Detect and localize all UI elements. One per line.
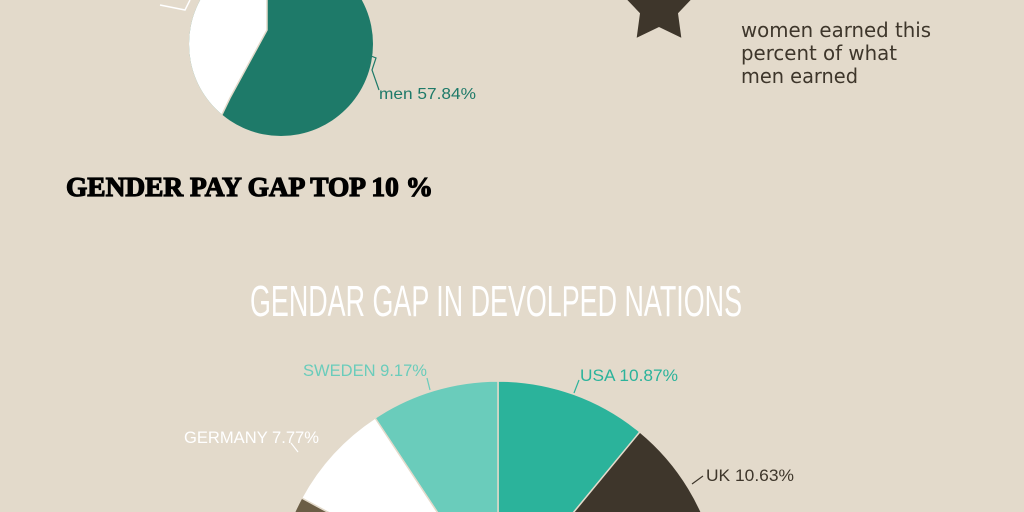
caption text: men earned <box>741 64 858 88</box>
caption text <box>741 18 931 88</box>
heading: gender pay gap: GENDER PAY GAP TOP 10 % <box>66 172 433 202</box>
pie chart: nations <box>275 381 716 512</box>
label: men <box>371 56 476 103</box>
slice: UK <box>498 432 716 512</box>
label: Sweden <box>303 361 430 390</box>
caption text: percent of what <box>741 41 897 65</box>
label: USA: USA 10.87% <box>580 366 678 385</box>
slice: other <box>275 498 498 512</box>
label: Sweden: SWEDEN 9.17% <box>303 361 427 380</box>
label: USA <box>574 366 678 393</box>
label: UK: UK 10.63% <box>706 466 794 485</box>
label: Germany: GERMANY 7.77% <box>184 428 319 447</box>
slice: Germany <box>302 418 498 512</box>
icon: star <box>623 0 695 38</box>
slice: Sweden <box>375 381 498 512</box>
pie chart: women vs men <box>160 0 476 136</box>
caption text: women earned this <box>741 18 931 42</box>
slice: USA <box>498 381 640 512</box>
label: men: men 57.84% <box>379 86 476 103</box>
